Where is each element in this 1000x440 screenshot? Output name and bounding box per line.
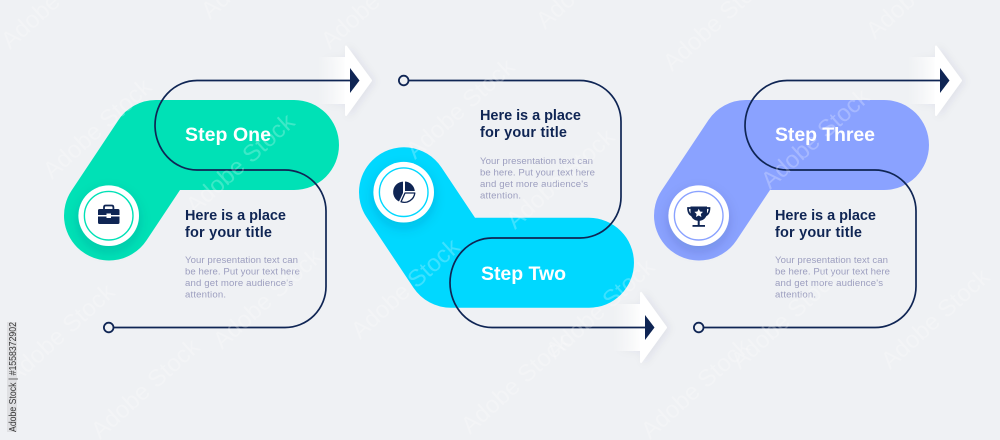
body text: and get more audience's <box>185 278 293 289</box>
shape: periwinkle arm <box>654 100 929 260</box>
arrow backing: white <box>613 293 666 362</box>
body text: Your presentation text can <box>185 255 298 266</box>
connector line with start dot <box>104 80 350 332</box>
watermarks: Adobe Stock <box>756 83 876 194</box>
title text <box>185 208 286 241</box>
arrowhead <box>350 68 360 93</box>
panel: step one <box>64 46 371 332</box>
icon: briefcase in white circle <box>78 185 139 246</box>
watermarks: Adobe Stock <box>346 233 466 344</box>
body text <box>185 255 300 300</box>
watermarks: Adobe Stock <box>541 253 661 364</box>
body text <box>775 255 890 300</box>
title text: for your title <box>480 125 567 141</box>
watermarks: Adobe Stock <box>208 243 328 354</box>
heading: step three: Step Three <box>775 124 875 146</box>
icon: trophy in white circle <box>668 185 729 246</box>
arrowhead <box>645 315 654 340</box>
body text: attention. <box>480 190 521 202</box>
connector line with start dot <box>399 76 645 328</box>
watermarks: Adobe Stock <box>876 263 996 374</box>
watermarks: Adobe Stock <box>501 123 621 234</box>
shape: cyan arm <box>359 147 634 308</box>
body text: be here. Put your text here <box>185 266 300 278</box>
title text: Here is a place <box>480 108 581 124</box>
watermarks: Adobe Stock <box>181 108 301 219</box>
stock id label: Adobe Stock | #1558372902 <box>8 322 19 432</box>
title text: for your title <box>775 225 862 241</box>
body text <box>480 156 595 202</box>
heading: step one: Step One <box>185 124 271 146</box>
watermarks: Adobe Stock <box>38 73 158 184</box>
panel: step three <box>654 46 961 332</box>
heading: step two: Step Two <box>481 263 566 285</box>
body text: Your presentation text can <box>775 255 888 266</box>
body text: and get more audience's <box>480 179 588 190</box>
body text: be here. Put your text here <box>775 266 890 278</box>
title text <box>775 208 876 241</box>
title text <box>480 108 581 141</box>
watermarks: Adobe Stock <box>401 53 521 164</box>
watermarks: Adobe Stock <box>1 278 121 389</box>
body text: be here. Put your text here <box>480 168 595 178</box>
arrowhead <box>940 68 950 93</box>
watermarks: Adobe Stock <box>456 328 576 439</box>
body text: attention. <box>185 290 226 300</box>
arrow backing: white <box>908 46 961 115</box>
shape: green arm <box>64 100 339 260</box>
connector line with start dot <box>694 80 940 332</box>
title text: Here is a place <box>775 208 876 224</box>
body text: attention. <box>775 290 816 300</box>
panel: step two <box>359 76 666 362</box>
body text: and get more audience's <box>775 278 883 289</box>
icon: pie chart in white circle <box>373 162 434 222</box>
watermarks: Adobe Stock <box>726 263 846 374</box>
title text: Here is a place <box>185 208 286 224</box>
arrow backing: white <box>318 46 371 115</box>
title text: for your title <box>185 225 272 241</box>
body text: Your presentation text can <box>480 156 593 167</box>
